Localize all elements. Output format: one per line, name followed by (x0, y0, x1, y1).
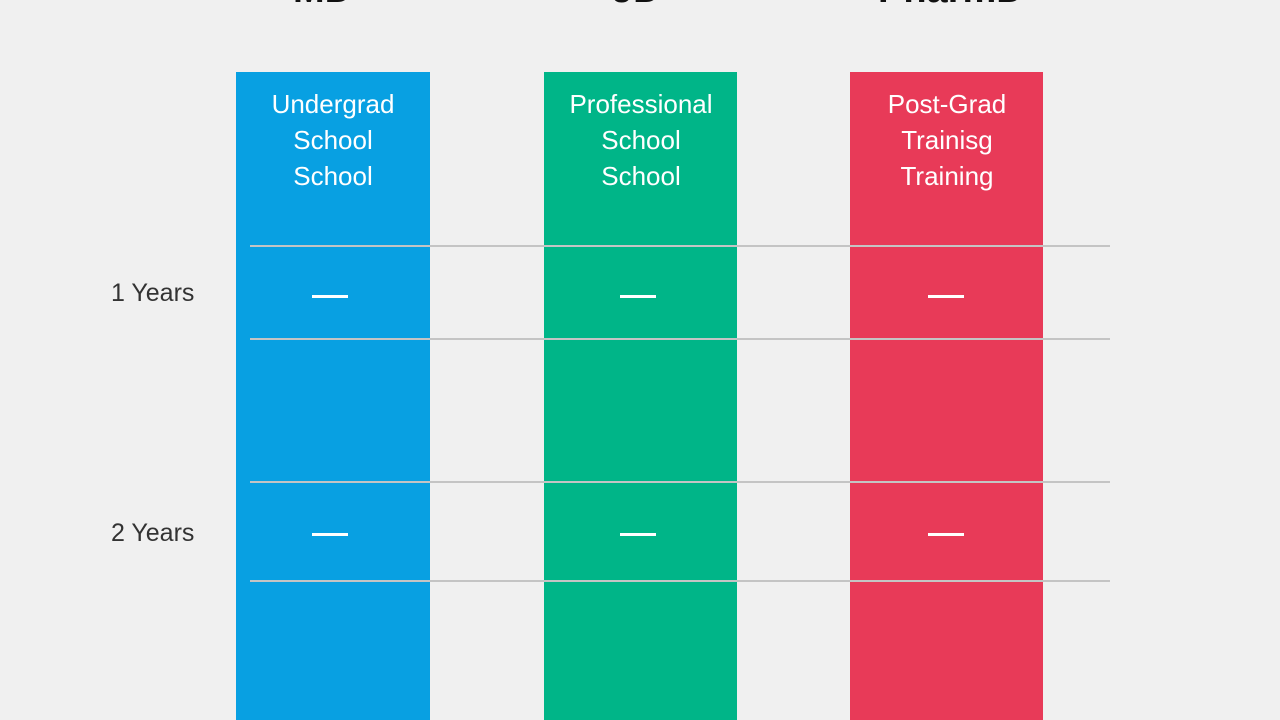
label: undergrad: Undergrad (272, 89, 394, 119)
column: post-grad (850, 72, 1043, 720)
column: undergrad (236, 72, 430, 720)
column: professional (544, 72, 737, 720)
year label 2: 2 Years (111, 519, 194, 547)
label: post-grad: Post-Grad (888, 89, 1006, 119)
label: professional (569, 89, 713, 191)
label: professional: Professional (569, 89, 713, 119)
year label 1: 1 Years (111, 279, 194, 307)
label: post-grad (888, 89, 1006, 191)
label: undergrad: School (293, 125, 373, 155)
dashes (312, 295, 348, 298)
label: undergrad: School (293, 161, 373, 191)
label: undergrad (272, 89, 394, 191)
label: post-grad: Training (901, 161, 993, 191)
label: professional: School (601, 161, 681, 191)
label: post-grad: Trainisg (901, 125, 993, 155)
label: professional: School (601, 125, 681, 155)
